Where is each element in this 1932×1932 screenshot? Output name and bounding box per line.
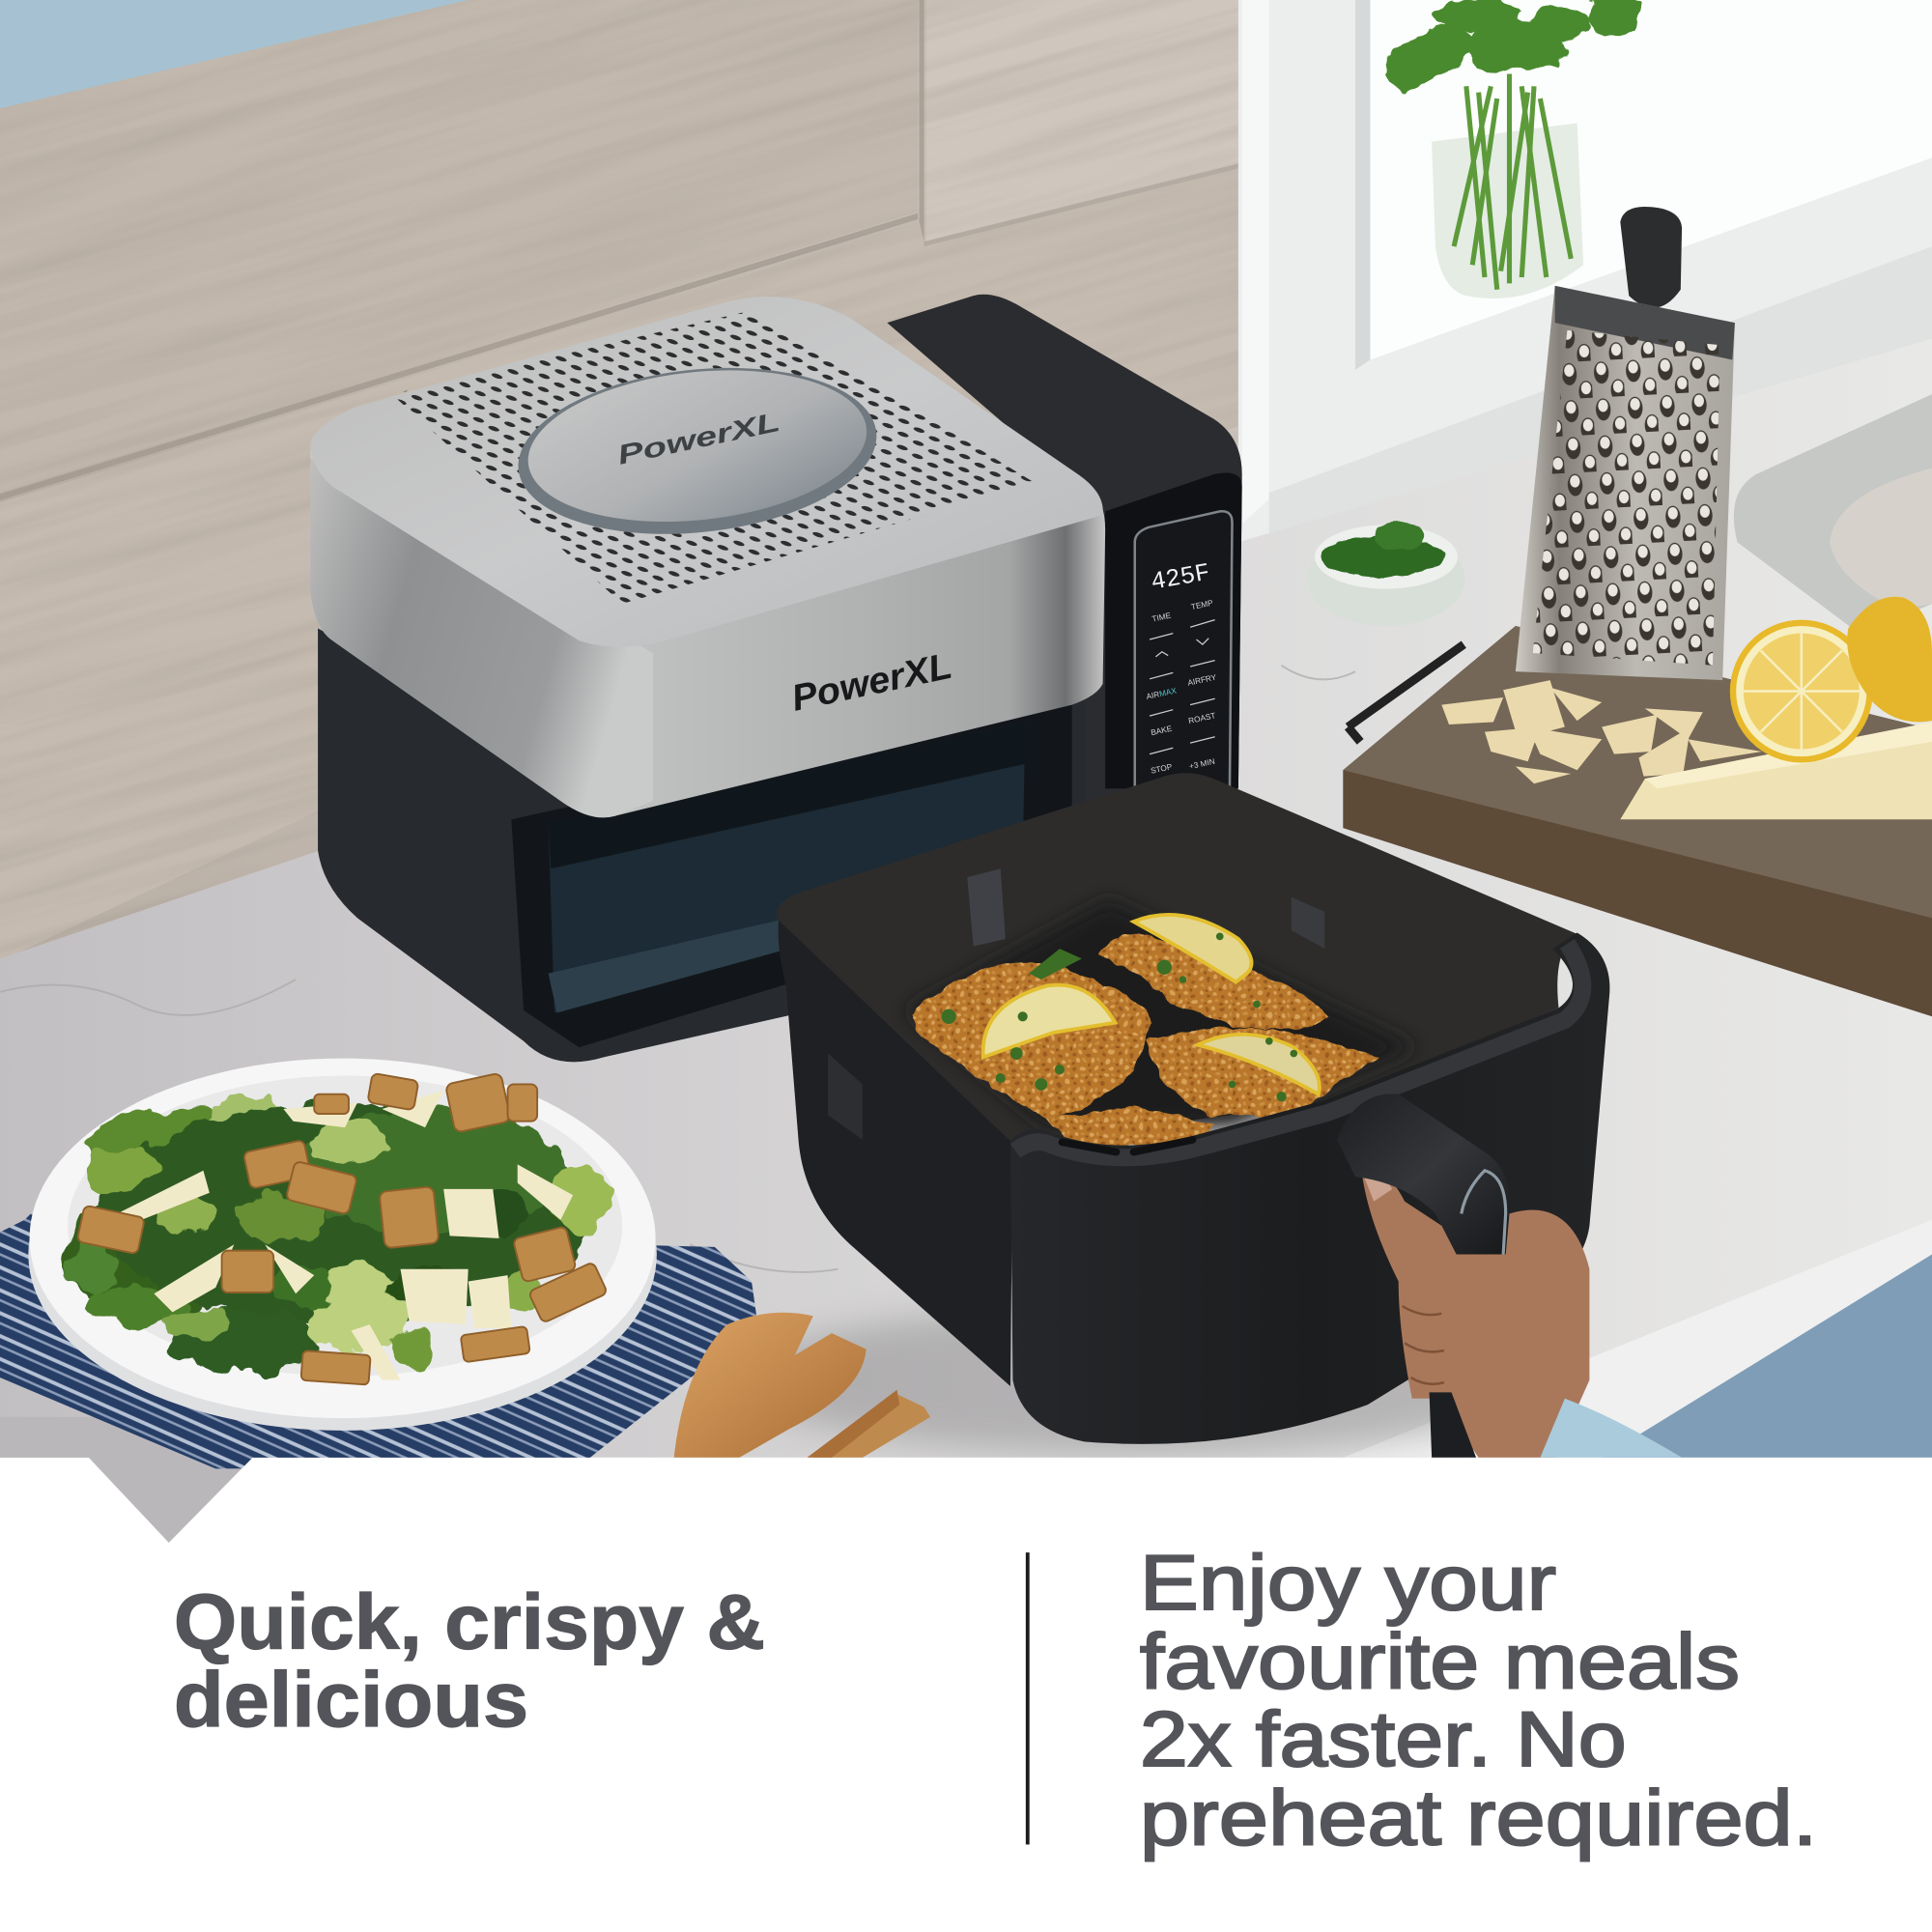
lemon slices and herbs (941, 915, 1320, 1101)
cutlet: right (1146, 1027, 1378, 1115)
fryer: dark base (318, 628, 1089, 1063)
salad plate (28, 1059, 657, 1431)
lemon slice: right (1198, 1035, 1320, 1094)
lemon half (1730, 620, 1873, 763)
control panel display (1135, 511, 1233, 788)
body text: enjoy your favourite meals: 2x faster. No (1140, 1696, 1627, 1783)
control labels: STOP (1150, 761, 1174, 776)
sink (1734, 394, 1932, 635)
heading: quick, crispy and delicious: Quick, crispy & (174, 1579, 765, 1666)
fryer: front logo: PowerXL (788, 645, 955, 720)
cutlet: rear (1099, 934, 1328, 1028)
croutons (77, 1073, 608, 1385)
parmesan flakes (117, 1091, 573, 1380)
basket: interior (776, 773, 1577, 1144)
divider (1026, 1552, 1030, 1844)
napkin (0, 1213, 757, 1468)
lemon slice: rear (1133, 915, 1252, 982)
parmesan shavings (1441, 680, 1762, 783)
marble veins (0, 666, 1355, 1272)
box grater (1516, 207, 1735, 680)
body text: enjoy your favourite meals: preheat required. (1140, 1775, 1817, 1861)
wooden salad servers (674, 1313, 930, 1458)
schnitzel cutlets (912, 934, 1378, 1146)
caption panel (174, 1540, 1817, 1861)
heading: quick, crispy and delicious: delicious (174, 1657, 528, 1744)
control labels: TIME (1151, 611, 1172, 624)
fryer: control column (887, 295, 1242, 801)
air fryer basket (776, 773, 1577, 1386)
caesar salad (62, 1073, 609, 1385)
fryer: steel left side (310, 458, 653, 817)
basket rim band (1015, 944, 1582, 1157)
cutlet: left (912, 962, 1152, 1119)
air fryer (310, 295, 1242, 1062)
blue cabinet (1602, 1251, 1932, 1458)
herbs (941, 933, 1297, 1101)
counter (0, 339, 1932, 1552)
body text: enjoy your favourite meals: Enjoy your (1140, 1540, 1556, 1627)
fryer: perforations (392, 310, 1035, 604)
cutlet: front (1047, 1106, 1213, 1146)
fryer: steel top (310, 297, 1103, 647)
background: wall tiles (0, 0, 1238, 958)
control labels: AIRFRY (1186, 672, 1218, 688)
basket shadow (739, 1306, 1552, 1454)
basket handle (1337, 1094, 1510, 1458)
fryer: steel housing (311, 423, 1105, 817)
control labels: TEMP (1190, 598, 1214, 611)
fryer: round lid (510, 352, 885, 551)
parmesan wedge (1620, 722, 1932, 819)
control labels: BAKE (1150, 724, 1173, 737)
body text: enjoy your favourite meals: favourite meals (1140, 1618, 1740, 1705)
lemon slice: left (983, 985, 1115, 1057)
basket: left wall (779, 918, 1012, 1386)
lemon wedge (1847, 597, 1932, 722)
control labels: +3 MIN (1188, 756, 1215, 771)
control labels: ROAST (1187, 710, 1216, 725)
hand and sleeve (1361, 1169, 1682, 1458)
fryer: round lid: PowerXL (614, 407, 782, 470)
lettuce (62, 1095, 609, 1375)
background: window (1238, 0, 1932, 554)
control labels: AIRMAX (1146, 685, 1178, 701)
heading: quick, crispy and delicious (174, 1579, 765, 1744)
basket front wall and rim (828, 933, 1609, 1444)
basket: floor (906, 899, 1417, 1127)
fryer: cavity (511, 696, 1072, 1047)
body text: enjoy your favourite meals (1140, 1540, 1817, 1861)
plant in glass jar (1377, 0, 1644, 298)
basket: interior tabs (967, 868, 1006, 947)
control labels: 425F (1149, 559, 1212, 597)
parsley bowl (1307, 522, 1465, 626)
cutting board (1343, 626, 1932, 1016)
control labels (1146, 559, 1218, 776)
